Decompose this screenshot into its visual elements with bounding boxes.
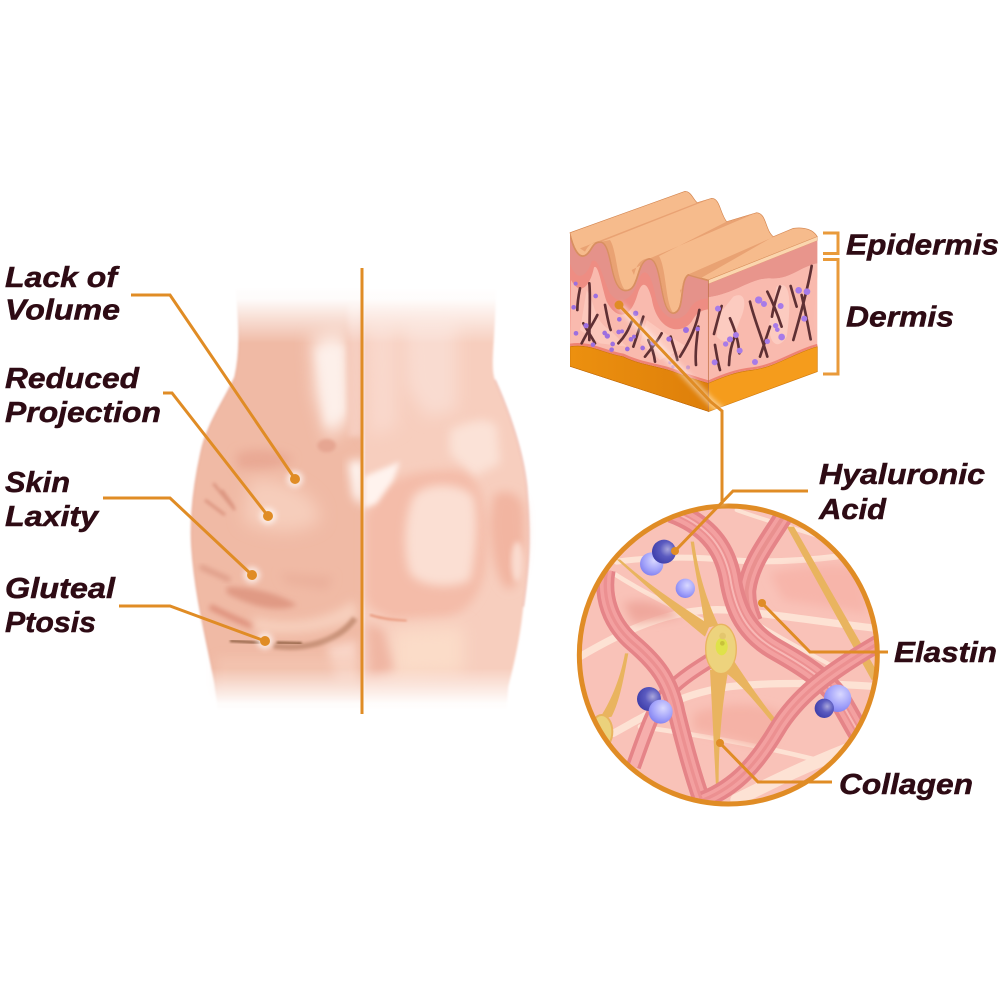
- callout: Elastin: Elastin: [894, 637, 997, 669]
- circle border: [579, 506, 877, 804]
- callout: Gluteal Ptosis: [5, 573, 273, 649]
- center divider line: [360, 268, 364, 714]
- callout: Hyaluronic Acid: Acid: [818, 494, 887, 526]
- right side: restored buttock: [364, 290, 529, 708]
- tan fibres: [787, 527, 880, 680]
- illustration: skin cross-section block: [570, 191, 817, 413]
- illustration: buttocks before and after: [191, 280, 537, 718]
- callout: Elastin: [758, 599, 997, 669]
- soft top and bottom fades: [200, 280, 537, 718]
- small fibroblast: [596, 714, 614, 742]
- top surface: [570, 191, 817, 313]
- callout: Reduced Projection: [5, 363, 276, 524]
- bracket: Dermis: [823, 260, 954, 374]
- elastin fibres left: [577, 283, 699, 365]
- callout: Reduced Projection: Reduced: [5, 363, 140, 395]
- hyaluronic acid spheres: [637, 540, 851, 724]
- callout: Hyaluronic Acid: Hyaluronic: [819, 459, 985, 491]
- left face layers: [570, 230, 710, 413]
- callout: Lack of Volume: Volume: [5, 294, 120, 326]
- callout: Reduced Projection: Projection: [5, 397, 161, 429]
- pale connective strands: [580, 510, 877, 800]
- callout: Skin Laxity: Skin: [5, 467, 70, 499]
- callout: Skin Laxity: [5, 467, 260, 583]
- bracket: Epidermis: Epidermis: [846, 230, 999, 262]
- collagen ribbon back: [633, 517, 783, 767]
- callout: Lack of Volume: [5, 262, 303, 487]
- connector: dermis to magnified circle: [614, 300, 722, 504]
- callout: Collagen: Collagen: [839, 769, 973, 801]
- callout: Hyaluronic Acid: [671, 459, 985, 555]
- callout: Gluteal Ptosis: Ptosis: [5, 607, 96, 639]
- magnified circle: dermis fibres: [570, 500, 890, 810]
- right face layers: [708, 237, 817, 412]
- callout: Skin Laxity: Laxity: [5, 501, 100, 533]
- left side: aged buttock: [191, 290, 363, 708]
- callout: Gluteal Ptosis: Gluteal: [5, 573, 116, 605]
- bracket: Dermis: Dermis: [846, 302, 954, 334]
- collagen ribbons front: [605, 512, 878, 800]
- callout: Lack of Volume: Lack of: [5, 262, 121, 294]
- callout: Collagen: [716, 739, 973, 801]
- fibroblast cell: [617, 542, 775, 787]
